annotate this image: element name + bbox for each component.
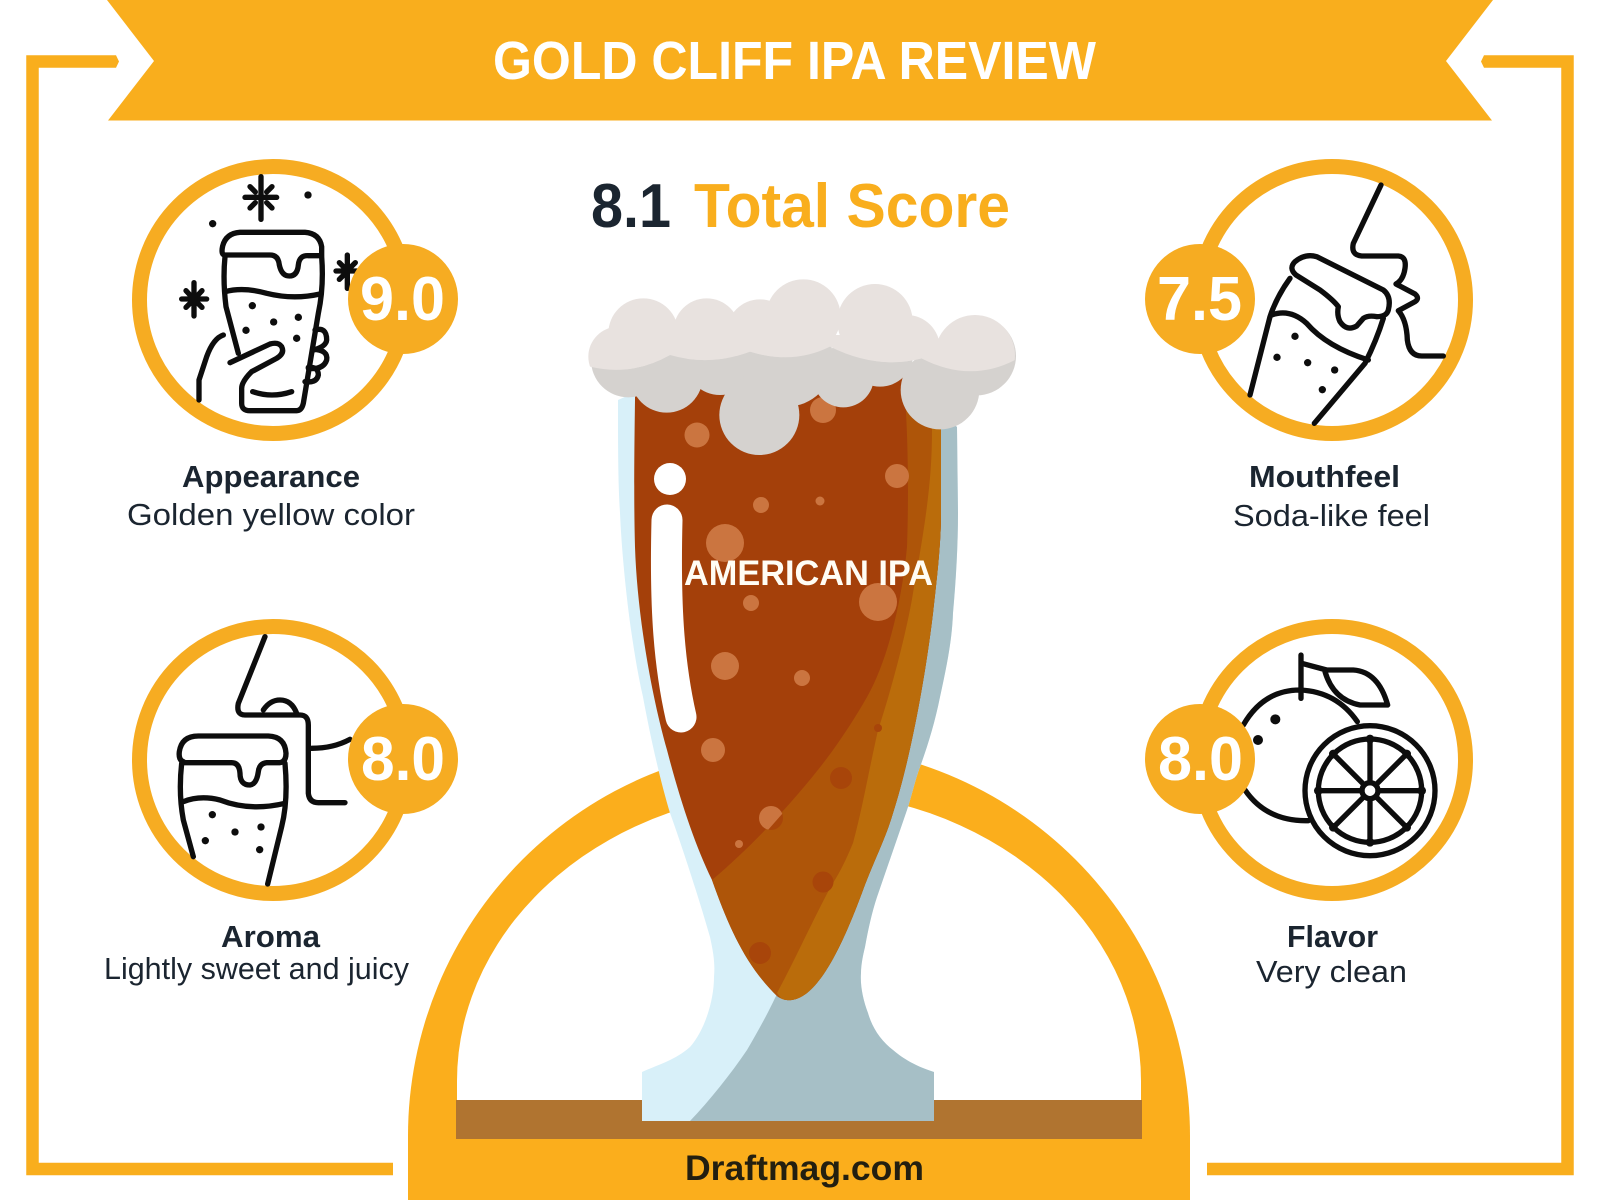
- score badge: [348, 244, 458, 354]
- arch behind glass: [408, 745, 1190, 1200]
- title banner: [107, 0, 1493, 120]
- glass highlight: [654, 463, 686, 717]
- ring: [140, 166, 406, 434]
- beer light tone: [777, 428, 941, 1000]
- description: Soda-like feel: [1233, 498, 1430, 533]
- wooden table: [456, 1100, 1142, 1139]
- score badge: 8.0: [361, 725, 445, 794]
- icon: beer glass in hand: [182, 177, 358, 411]
- ring: [1198, 626, 1466, 894]
- beer glass: [588, 279, 1016, 1121]
- panel: flavor: [1145, 626, 1466, 989]
- icon: citrus fruit: [1243, 655, 1435, 856]
- description: Golden yellow color: [127, 497, 415, 532]
- panel: appearance: [127, 166, 458, 532]
- beer mid tone: [712, 410, 941, 1000]
- score badge: 8.0: [1158, 725, 1243, 794]
- icon: nose smelling beer: [179, 637, 350, 884]
- dark bubbles: [749, 724, 882, 964]
- label: Flavor: [1287, 919, 1378, 954]
- label: Aroma: [221, 919, 321, 954]
- score badge: [348, 704, 458, 814]
- source label: Draftmag.com: [685, 1149, 924, 1188]
- description: Lightly sweet and juicy: [104, 951, 409, 986]
- beer: [634, 375, 941, 1000]
- score badge: [1145, 244, 1255, 354]
- glass label: AMERICAN IPA: [684, 554, 933, 593]
- icon: drinking beer: [1250, 185, 1443, 423]
- score badge: [1145, 704, 1255, 814]
- total score heading: Total Score: [694, 172, 1010, 241]
- label: Mouthfeel: [1249, 459, 1400, 494]
- description: Very clean: [1256, 954, 1407, 989]
- panel: aroma: [104, 626, 458, 986]
- light bubbles: [684, 397, 909, 848]
- label: Appearance: [182, 459, 360, 494]
- score badge: 9.0: [360, 265, 445, 334]
- glass body: [618, 390, 958, 1121]
- ring: [140, 626, 406, 894]
- title banner: GOLD CLIFF IPA REVIEW: [493, 31, 1096, 91]
- total score heading: 8.1: [591, 172, 671, 241]
- foam: [588, 279, 1016, 455]
- panel: mouthfeel: [1145, 166, 1466, 533]
- glass shaded side: [690, 400, 958, 1121]
- ring: [1198, 166, 1466, 434]
- score badge: 7.5: [1157, 265, 1242, 334]
